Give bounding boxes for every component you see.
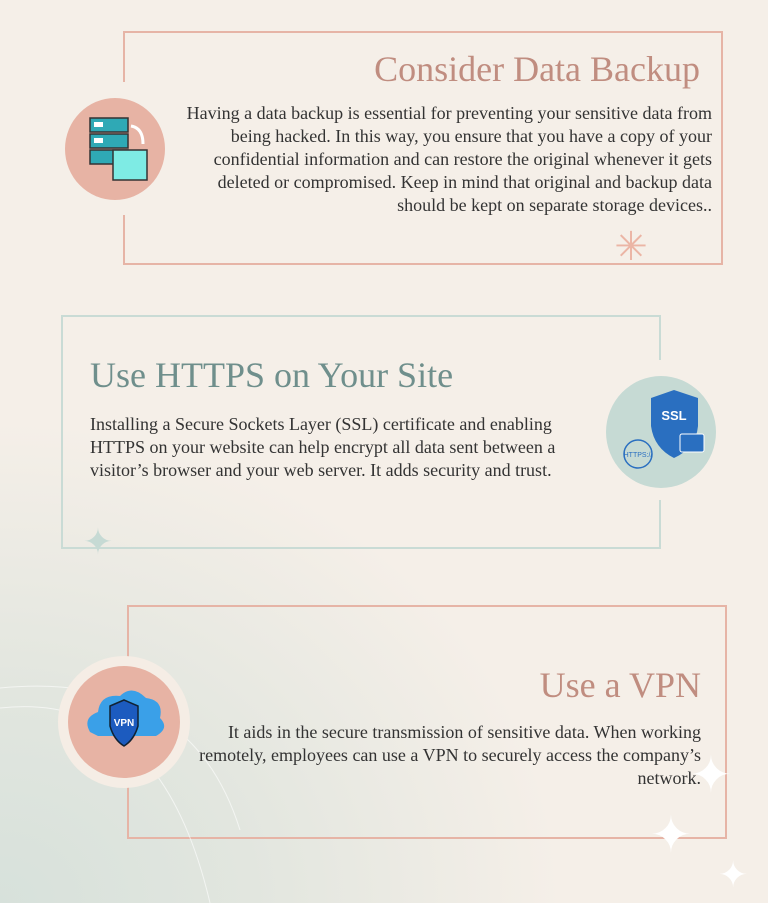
icon: ssl shield: SSL	[661, 408, 687, 423]
panel: https	[61, 315, 716, 562]
icon: vpn cloud: VPN	[114, 718, 134, 729]
icon: vpn cloud	[58, 656, 190, 788]
icon: ssl shield	[606, 376, 716, 488]
icon: sparkles	[650, 747, 748, 895]
icon: ssl shield: HTTPS://	[624, 452, 652, 459]
icon: sparkles: ✦	[690, 747, 732, 803]
icon: sparkle: ✦	[83, 522, 113, 562]
icon: sparkle: ✳	[614, 224, 648, 269]
icon: server backup	[65, 98, 165, 200]
title: Use a VPN	[540, 665, 701, 705]
title: Use HTTPS on Your Site	[90, 355, 453, 395]
title: Consider Data Backup	[374, 49, 700, 89]
text block: Installing a Secure Sockets Layer (SSL) certificate and enabling HTTPS on your website can help encrypt all data sent between a visitor’s browser and your web server. It adds security and trust.	[90, 414, 555, 480]
icon: sparkles: ✦	[718, 855, 748, 895]
text block: It aids in the secure transmission of sensitive data. When working remotely, employees can use a VPN to securely access the company’s network.	[199, 722, 701, 788]
icon: sparkles: ✦	[650, 807, 692, 863]
text block: Having a data backup is essential for preventing your sensitive data from being hacked. In this way, you ensure that you have a copy of your confidential information and can restore the original whenever it gets deleted or compromised. Keep in mind that original and backup data should be kept on separate storage devices..	[187, 103, 712, 215]
panel: vpn	[0, 605, 748, 903]
panel: data backup	[65, 31, 723, 269]
